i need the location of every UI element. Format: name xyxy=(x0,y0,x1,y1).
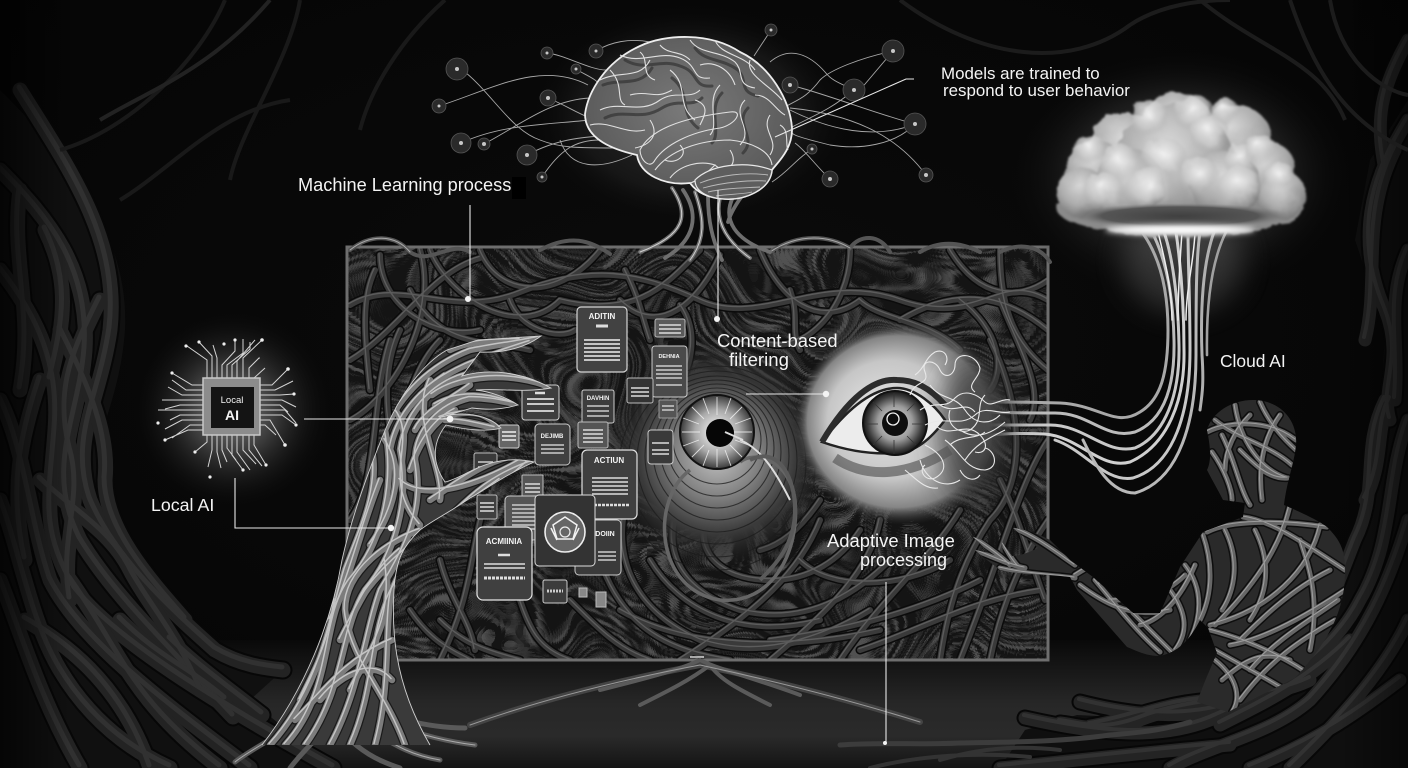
callout: Models are trained to respond to user behavior xyxy=(941,64,1130,100)
card: small left lower xyxy=(477,495,497,519)
card: ACMIINIA xyxy=(477,527,532,600)
brain outline xyxy=(585,37,792,199)
card: ADITIN xyxy=(577,307,627,372)
vines over top edge xyxy=(350,238,1050,262)
card: DEHNIA: DEHNIA xyxy=(658,354,680,360)
eye shadow below xyxy=(835,450,950,472)
leader lines xyxy=(235,79,914,743)
callout: Adaptive Image processing: processing xyxy=(860,550,947,570)
screen stand roots xyxy=(470,660,920,725)
chip body xyxy=(203,378,260,435)
card: ACTIUN xyxy=(582,450,637,519)
callout: Content-based filtering xyxy=(717,330,838,370)
card: small top xyxy=(655,319,685,337)
card: ADITIN: ADITIN xyxy=(589,312,616,321)
person made of vines xyxy=(960,395,1355,715)
right vine mass xyxy=(840,0,1408,768)
card: DOIIN xyxy=(575,520,621,575)
callout: Adaptive Image processing xyxy=(827,530,955,570)
card: right small xyxy=(648,430,673,464)
floor xyxy=(0,640,1408,768)
card: DOIIN: DOIIN xyxy=(595,531,615,538)
card: text sheet xyxy=(505,496,543,540)
hand made of vines xyxy=(235,330,560,768)
card: finger xyxy=(499,425,519,448)
card: ACTIUN: ACTIUN xyxy=(594,456,624,465)
callout: Content-based filtering: Content-based xyxy=(717,330,838,351)
card: left hand xyxy=(522,385,559,420)
eye lids xyxy=(822,388,945,453)
card: dial emblem xyxy=(535,495,595,566)
big eye xyxy=(795,321,1013,525)
cloud puffs xyxy=(1056,92,1306,236)
card: DAVHIN: DAVHIN xyxy=(587,396,609,402)
panel: vine-covered screen xyxy=(347,238,1050,660)
cerebellum xyxy=(695,165,772,199)
card: DEJIMB: DEJIMB xyxy=(541,434,564,440)
callout: Models are trained to respond to user behavior: Models are trained to xyxy=(941,64,1100,83)
callout: Local AI: Local AI xyxy=(151,495,214,515)
chip icon xyxy=(132,310,332,510)
floating document cards xyxy=(474,307,687,607)
callout: Content-based filtering: filtering xyxy=(729,349,789,370)
cloud stems xyxy=(985,232,1226,493)
leader dots xyxy=(388,296,887,745)
card: DAVHIN xyxy=(582,390,614,423)
cloud with stems xyxy=(985,50,1350,493)
card: small middle xyxy=(627,378,653,403)
hand roots xyxy=(235,720,475,768)
tendrils to node circles xyxy=(439,30,926,182)
curly filaments xyxy=(905,351,1010,488)
card: bottom small xyxy=(543,580,567,603)
callout: Machine Learning process: Machine Learning process xyxy=(298,175,511,195)
chip traces xyxy=(158,339,296,470)
card: tiny icons xyxy=(579,588,606,607)
card: DEJIMB xyxy=(535,424,570,465)
card: ACMIINIA: ACMIINIA xyxy=(486,537,522,546)
chip label: Local xyxy=(221,395,243,406)
small eye xyxy=(680,395,795,580)
brain folds xyxy=(590,40,788,183)
callout: Cloud AI: Cloud AI xyxy=(1220,351,1286,371)
card: small left xyxy=(474,453,497,477)
card: small center xyxy=(522,475,543,500)
callout: Adaptive Image processing: Adaptive Image xyxy=(827,530,955,551)
chip icon: AI xyxy=(225,407,239,423)
card: DEHNIA xyxy=(652,346,687,397)
left vine mass xyxy=(0,0,445,768)
brain with neural tendrils xyxy=(432,5,933,260)
card: small xyxy=(659,400,677,418)
iris xyxy=(863,391,927,455)
node circles xyxy=(432,24,933,187)
brain trunk xyxy=(640,188,770,260)
card: below DAVHIN xyxy=(578,422,608,448)
dark gyri shading xyxy=(603,48,758,153)
callout: Models are trained to respond to user behavior: respond to user behavior xyxy=(943,81,1130,100)
tunnel spiral xyxy=(605,343,829,600)
